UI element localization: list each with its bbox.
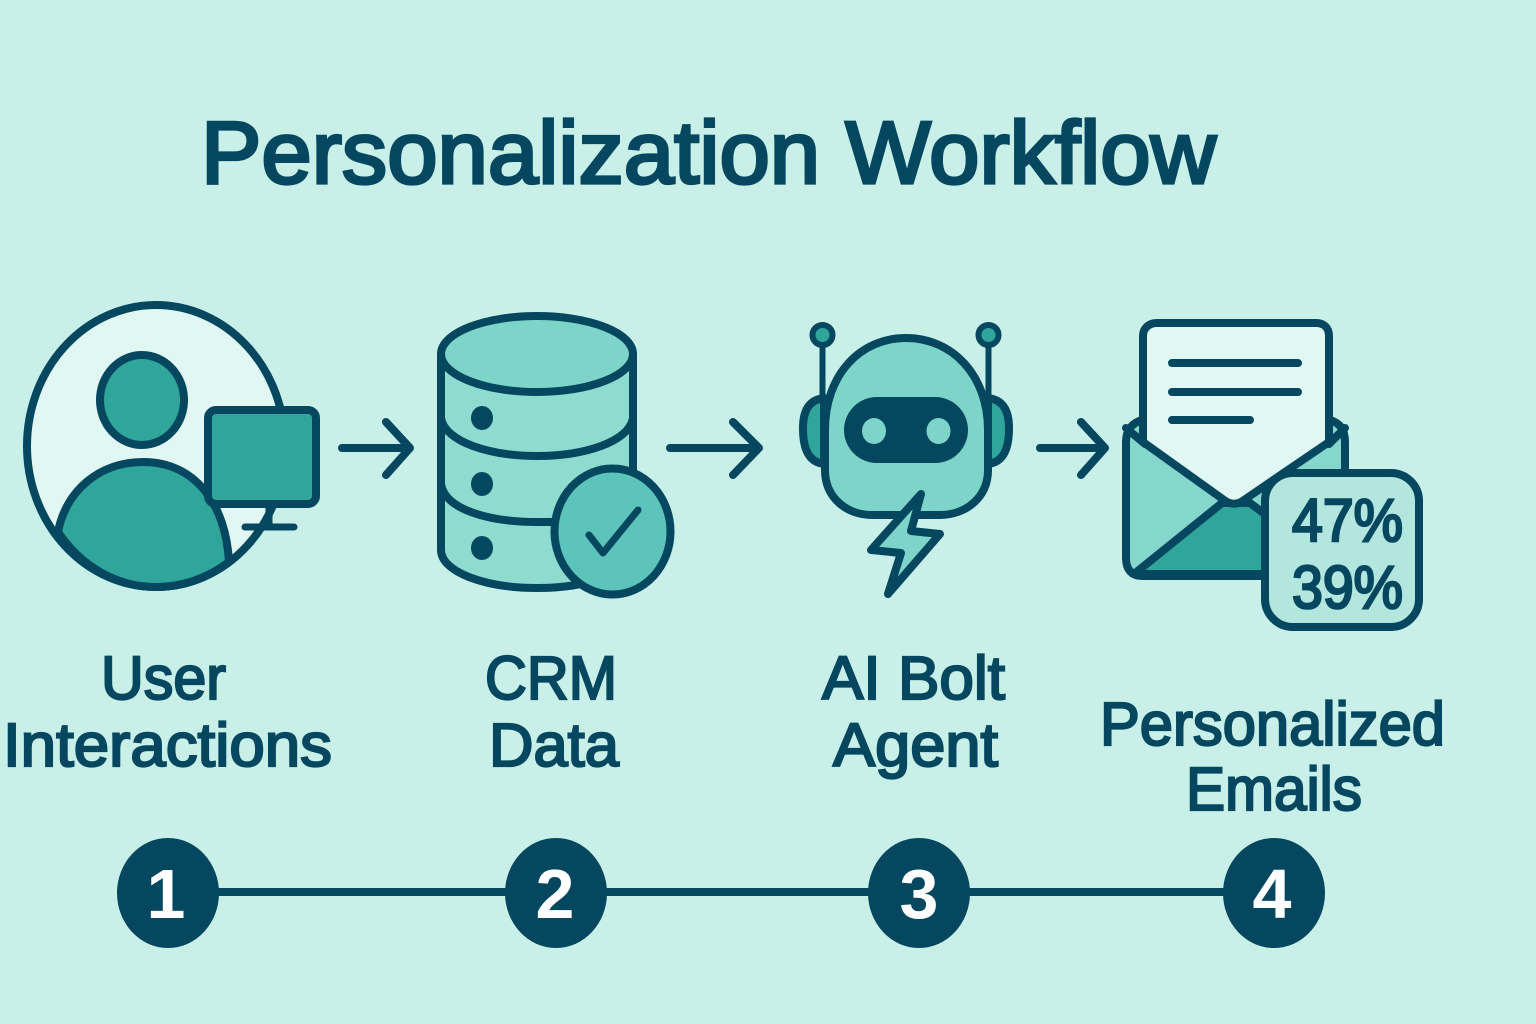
- icon: personalized email: [1126, 323, 1419, 627]
- icon: envelope: [1126, 420, 1345, 576]
- label: personalized emails: [1100, 690, 1445, 823]
- icon: person head: [100, 355, 184, 445]
- label: AI bolt agent: AI Bolt: [822, 644, 1005, 712]
- icon: visor: [844, 397, 968, 463]
- step 4 marker: 4: [1253, 855, 1292, 933]
- icon: CRM database: [441, 316, 670, 594]
- label: AI bolt agent: Agent: [833, 711, 998, 779]
- label: CRM data: Data: [489, 711, 619, 779]
- icon: lightning bolt: [871, 494, 940, 594]
- arrow: step 2 to 3: [670, 422, 759, 475]
- icon: letter lines: [1172, 363, 1298, 420]
- step 1 marker: 1: [147, 855, 185, 933]
- label: user interactions: [3, 644, 332, 779]
- label: user interactions: Interactions: [3, 711, 332, 779]
- step 2 marker: 2: [536, 855, 574, 933]
- label: user interactions: User: [101, 644, 226, 712]
- arrow: step 3 to 4: [1040, 422, 1105, 475]
- icon: AI robot: [803, 325, 1009, 594]
- step 3 marker: 3: [900, 855, 938, 933]
- label: personalized emails: Emails: [1186, 755, 1362, 823]
- icon: envelope corners: [1130, 430, 1340, 446]
- step 2 marker: [505, 838, 607, 948]
- arrow: step 1 to 2: [342, 422, 410, 475]
- label: CRM data: [485, 644, 619, 779]
- icon: check mark: [589, 510, 638, 553]
- icon: check badge: [554, 468, 670, 594]
- icon: monitor stand: [245, 508, 294, 527]
- stat badge: [1265, 473, 1419, 627]
- icon: ears: [803, 398, 1009, 464]
- stat: 39%: 39%: [1292, 554, 1403, 621]
- icon: user interactions: [27, 305, 316, 587]
- timeline connector: [168, 888, 1274, 896]
- label: AI bolt agent: [822, 644, 1005, 779]
- icon: person body: [58, 462, 229, 587]
- icon: database dots: [471, 406, 493, 560]
- icon: envelope flap: [1134, 503, 1345, 574]
- icon: monitor: [208, 410, 316, 504]
- step 4 marker: [1223, 838, 1325, 948]
- icon: letter: [1143, 323, 1329, 504]
- label: CRM data: CRM: [485, 644, 617, 712]
- icon: antennae: [812, 325, 998, 400]
- stat: 47%: 47%: [1292, 487, 1403, 554]
- icon: eyes: [862, 418, 950, 444]
- icon: robot head: [825, 338, 988, 515]
- step 1 marker: [117, 838, 219, 948]
- label: personalized emails: Personalized: [1100, 690, 1445, 758]
- title: Personalization Workflow: [201, 103, 1216, 202]
- step 3 marker: [868, 838, 970, 948]
